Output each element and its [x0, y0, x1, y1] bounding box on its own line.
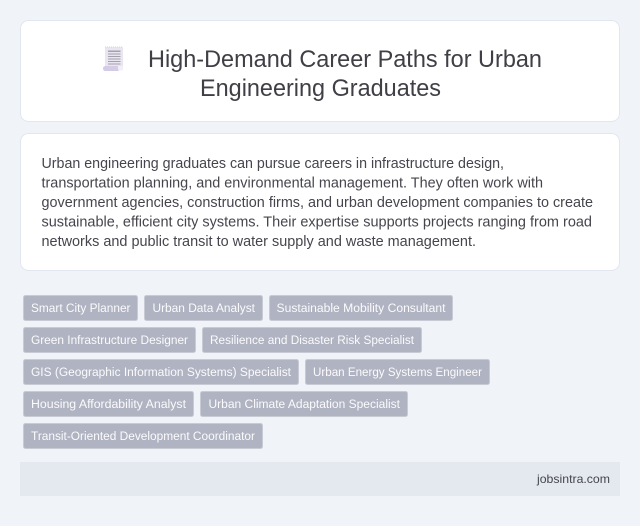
tag: Transit-Oriented Development Coordinator: [24, 424, 262, 448]
text block: description: Urban engineering graduates can pursue careers in infrastructure design,: [42, 156, 504, 172]
title: [148, 46, 542, 102]
tag: Housing Affordability Analyst: Housing Affordability Analyst: [31, 397, 187, 411]
text block: description: sustainable, efficient city systems. Their expertise supports projects ranging from road: [42, 214, 592, 230]
footer: jobsintra.com: [536, 472, 610, 486]
tag: Urban Data Analyst: Urban Data Analyst: [152, 301, 256, 315]
panel: header: [20, 20, 620, 122]
tag: Urban Energy Systems Engineer: Urban Energy Systems Engineer: [313, 365, 482, 379]
title: High-Demand Career Paths for Urban: [148, 46, 542, 73]
tag: Green Infrastructure Designer: [24, 328, 196, 352]
tag list: [24, 296, 490, 448]
text block: description: [42, 156, 593, 250]
tag: Sustainable Mobility Consultant: [270, 296, 452, 320]
tag: Smart City Planner: Smart City Planner: [31, 301, 130, 315]
title: Engineering Graduates: [200, 75, 441, 102]
tag: Sustainable Mobility Consultant: Sustainable Mobility Consultant: [276, 301, 446, 315]
text block: description: transportation planning, and environmental management. They often work with: [42, 176, 543, 192]
tag: Urban Climate Adaptation Specialist: Urban Climate Adaptation Specialist: [208, 397, 401, 411]
footer: [20, 462, 620, 496]
icon: document scroll: [103, 47, 123, 71]
text block: description: networks and public transit to water supply and waste management.: [42, 234, 476, 250]
tag: Smart City Planner: [24, 296, 138, 320]
tag: Urban Energy Systems Engineer: [306, 360, 490, 384]
tag: GIS Specialist: [24, 360, 298, 384]
tag: Green Infrastructure Designer: Green Infrastructure Designer: [31, 333, 188, 347]
tag: Housing Affordability Analyst: [24, 392, 194, 416]
tag: GIS Specialist: GIS (Geographic Information Systems) Specialist: [31, 365, 292, 379]
tag: Transit-Oriented Development Coordinator: Transit-Oriented Development Coordinator: [31, 429, 255, 443]
panel: description: [20, 134, 620, 270]
tag: Resilience and Disaster Risk Specialist: Resilience and Disaster Risk Specialist: [210, 333, 415, 347]
tag: Resilience and Disaster Risk Specialist: [202, 328, 422, 352]
tag: Urban Climate Adaptation Specialist: [200, 392, 408, 416]
tag: Urban Data Analyst: [144, 296, 262, 320]
text block: description: government agencies, construction firms, and urban development companies to create: [42, 195, 593, 211]
